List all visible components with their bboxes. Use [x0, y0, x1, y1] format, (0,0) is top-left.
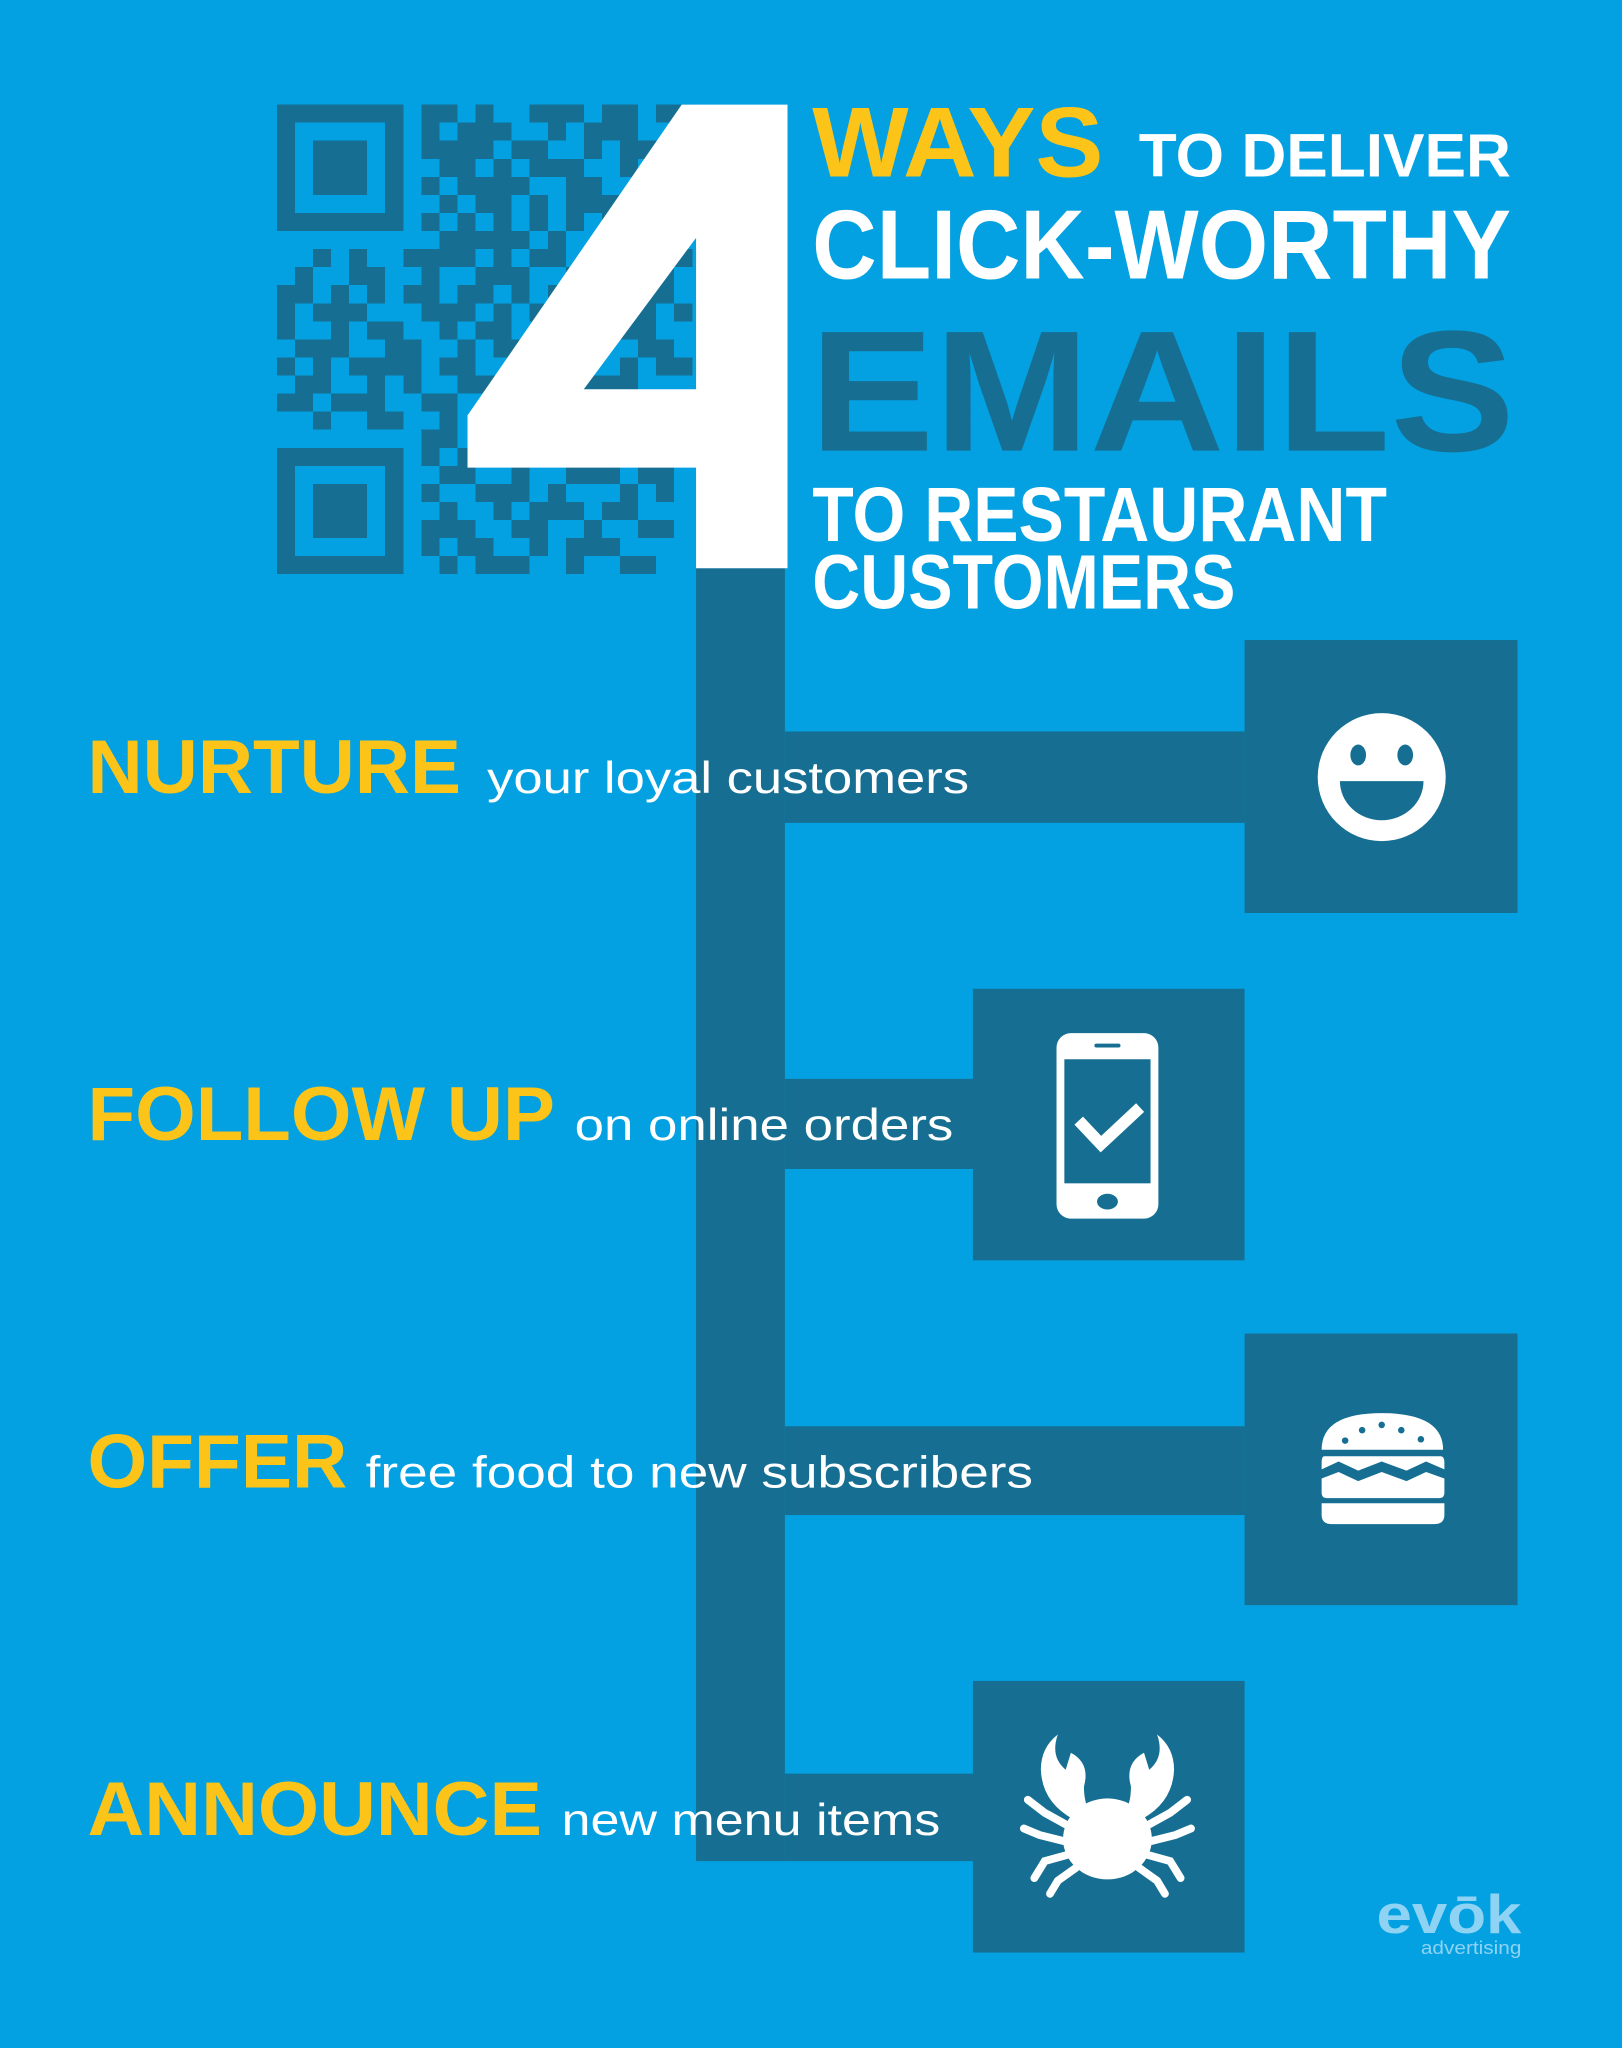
connector tree — [696, 568, 1245, 1861]
step 3: offer: OFFER — [87, 1420, 347, 1505]
icon box: burger — [1245, 1334, 1518, 1605]
step 1: nurture — [87, 725, 969, 810]
step 3: offer — [87, 1420, 1033, 1505]
title: CUSTOMERS — [812, 540, 1235, 626]
step 4: announce — [87, 1767, 940, 1852]
QR code pattern — [277, 105, 692, 574]
step 4: announce: new menu items — [562, 1796, 940, 1845]
title: TO RESTAURANT — [812, 472, 1387, 558]
title: TO DELIVER — [1139, 121, 1511, 190]
icon box: phone with check — [973, 989, 1245, 1260]
step 2: follow up — [87, 1072, 953, 1157]
title: EMAILS — [810, 295, 1515, 488]
step 3: offer: free food to new subscribers — [366, 1449, 1033, 1498]
step 2: follow up: on online orders — [575, 1101, 953, 1150]
logo: advertising — [1421, 1937, 1521, 1958]
icon box: crab — [973, 1681, 1245, 1953]
step 2: follow up: FOLLOW UP — [87, 1072, 555, 1157]
title: CLICK-WORTHY — [812, 189, 1511, 299]
step 4: announce: ANNOUNCE — [87, 1767, 542, 1852]
title: WAYS — [812, 87, 1104, 198]
icon box: smiley — [1245, 640, 1518, 913]
logo: evōk — [1376, 1883, 1522, 1945]
big number 4 — [468, 105, 787, 568]
step 1: nurture: NURTURE — [87, 725, 461, 810]
title — [810, 87, 1515, 626]
step 1: nurture: your loyal customers — [487, 754, 969, 803]
